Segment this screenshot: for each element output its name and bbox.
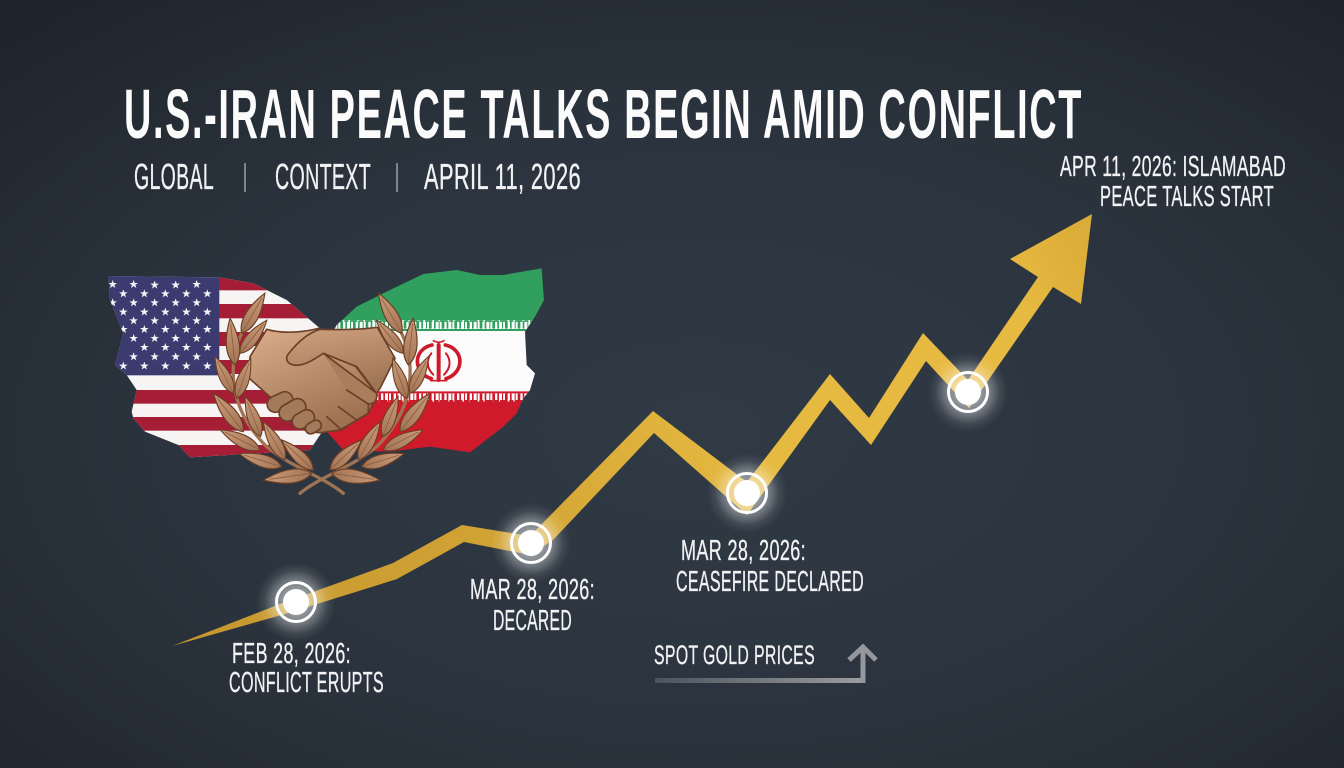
Iranian emblem: [417, 341, 460, 381]
label: Feb 28 conflict erupts: CONFLICT ERUPTS: [229, 667, 384, 699]
handshake: [249, 327, 395, 436]
subtitle row: [134, 156, 581, 197]
subtitle: global: GLOBAL: [134, 156, 214, 197]
marker: Apr 11: [928, 352, 1008, 432]
label: Feb 28 conflict erupts: [229, 638, 384, 699]
marker: Mar 28 declared: [491, 503, 571, 583]
label: Mar 28 decared: [470, 574, 595, 637]
icon: flags, handshake and laurel wreath: [103, 267, 550, 493]
subtitle: date: APRIL 11, 2026: [424, 156, 581, 197]
chart: spot gold price line: [172, 214, 1092, 646]
laurel wreath: [208, 290, 435, 493]
Iran flag map: [320, 267, 550, 458]
label: Mar 28 decared: MAR 28, 2026:: [470, 574, 595, 606]
label: Apr 11 Islamabad peace talks start: [1060, 151, 1286, 213]
subtitle: context: CONTEXT: [275, 156, 371, 197]
legend: spot gold prices: [654, 640, 876, 683]
label: Mar 28 ceasefire declared: MAR 28, 2026:: [681, 535, 806, 567]
marker: Mar 28 ceasefire: [707, 453, 787, 533]
gold trend arrow: [172, 214, 1092, 646]
label: Mar 28 ceasefire declared: CEASEFIRE DECLARED: [676, 566, 864, 598]
label: Mar 28 ceasefire declared: [676, 535, 864, 598]
label: Feb 28 conflict erupts: FEB 28, 2026:: [232, 638, 351, 670]
label: Mar 28 decared: DECARED: [493, 605, 572, 637]
U.S. flag map: [108, 276, 322, 458]
legend: spot gold prices: SPOT GOLD PRICES: [654, 640, 815, 670]
arrow: rising prices: [655, 647, 876, 683]
marker: Feb 28: [256, 562, 336, 642]
